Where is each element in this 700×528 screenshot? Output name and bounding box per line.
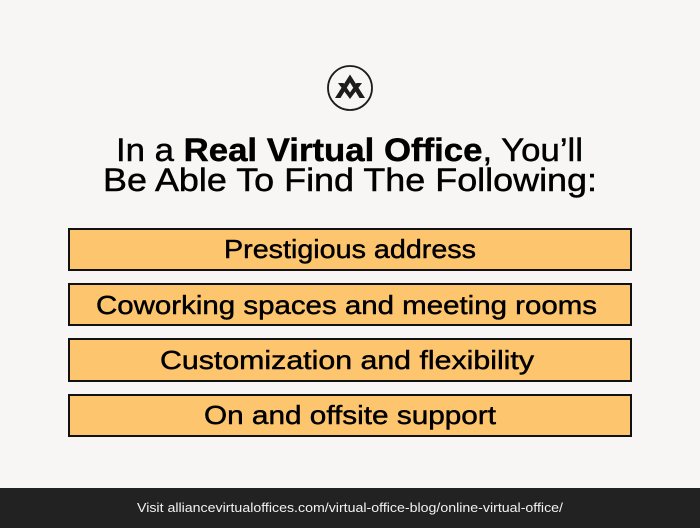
list item: coworking spaces: Coworking spaces and meeting rooms	[96, 290, 597, 320]
title: In a Real Virtual Office , You’ll	[116, 132, 583, 168]
list item: customization	[69, 339, 631, 381]
icon: alliance logo	[328, 66, 372, 110]
footer bar	[0, 488, 700, 528]
list item: prestigious address: Prestigious address	[224, 234, 476, 264]
title: Be Able To Find The Following:	[103, 162, 597, 198]
list item: coworking spaces	[69, 284, 631, 325]
list item: customization: Customization and flexibility	[160, 345, 534, 375]
title	[103, 132, 597, 198]
footer bar: Visit alliancevirtualoffices.com/virtual-office-blog/online-virtual-office/	[137, 500, 563, 515]
list item: prestigious address	[69, 229, 631, 270]
list item: support: On and offsite support	[204, 400, 497, 430]
list item: support	[69, 395, 631, 436]
